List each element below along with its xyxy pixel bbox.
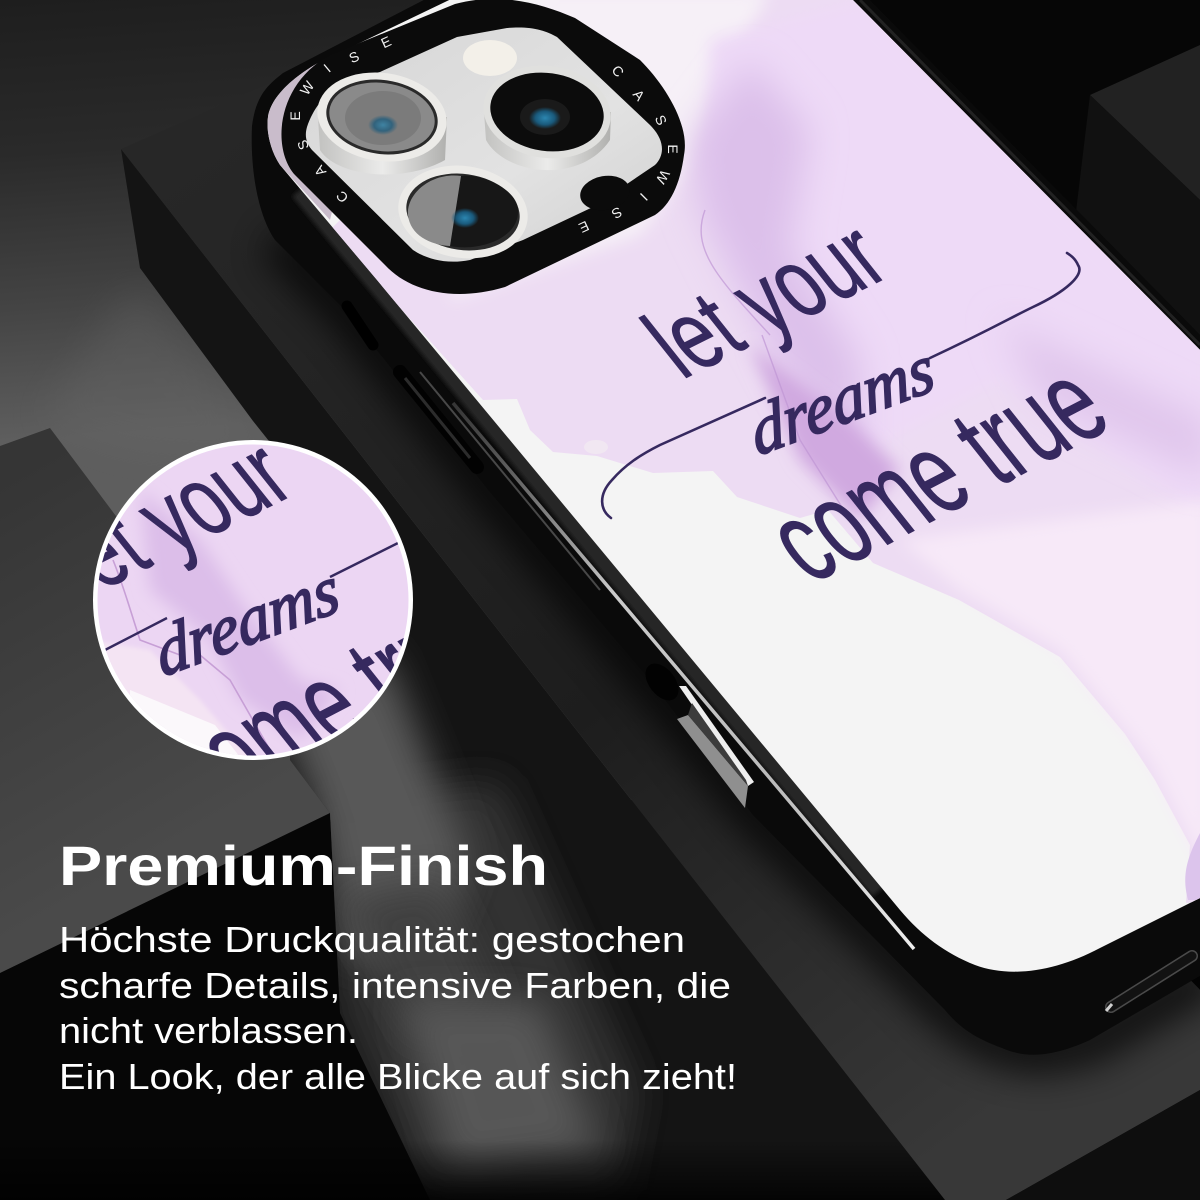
white top area bbox=[450, 0, 770, 300]
CASEWISE ring lettering: E bbox=[287, 111, 303, 121]
CASEWISE ring lettering: S bbox=[346, 48, 362, 66]
lens top-right bbox=[477, 58, 617, 170]
dark step front bbox=[0, 813, 430, 1200]
bottom port bbox=[1106, 956, 1192, 1011]
CASEWISE ring lettering: I bbox=[320, 61, 334, 75]
wide soft sheen bbox=[330, 780, 640, 1190]
secondary rim stripe bbox=[420, 372, 600, 590]
circle: let your: let your bbox=[28, 418, 313, 616]
lens bottom bbox=[392, 157, 534, 267]
circle: flourish bbox=[105, 543, 398, 650]
right patch bbox=[1185, 833, 1200, 900]
let your: let your bbox=[623, 200, 908, 398]
wash edge lines bbox=[701, 210, 850, 520]
print lettering bbox=[602, 200, 1132, 606]
CASEWISE ring lettering: C bbox=[333, 188, 351, 206]
block side face with lit band bbox=[100, 140, 960, 1200]
CASEWISE ring lettering: E bbox=[576, 218, 592, 236]
CASEWISE ring lettering: E bbox=[665, 144, 681, 154]
camera glass bbox=[306, 27, 662, 262]
side button silver bbox=[639, 657, 754, 808]
LiDAR bbox=[577, 172, 633, 214]
lower step surface bbox=[0, 428, 340, 975]
shiny rim stripe bbox=[453, 403, 914, 949]
top-right block bbox=[1090, 45, 1200, 200]
come true: come true bbox=[740, 337, 1132, 606]
circle watercolor bbox=[140, 490, 340, 740]
CASEWISE ring lettering: A bbox=[630, 86, 649, 104]
flourish right bbox=[930, 253, 1079, 358]
CASEWISE ring lettering: S bbox=[609, 204, 625, 222]
body text bbox=[59, 919, 737, 1097]
case outer body bbox=[252, 0, 1200, 1055]
lens top-left bbox=[312, 64, 452, 174]
camera bezel bbox=[268, 0, 685, 294]
lit glow left of the block bbox=[40, 290, 270, 460]
button slot volume bbox=[400, 372, 477, 467]
CASEWISE ring lettering: A bbox=[310, 162, 329, 179]
flash bbox=[463, 40, 517, 76]
pale lilac wash bbox=[330, 0, 1200, 903]
CASEWISE ring lettering: S bbox=[652, 112, 670, 128]
CASEWISE ring lettering: C bbox=[609, 62, 627, 80]
upper lit band bbox=[280, 650, 470, 960]
middle lit band bbox=[354, 878, 479, 1000]
detail zoom circle bbox=[93, 440, 413, 760]
line 3: nicht verblassen. bbox=[59, 1010, 358, 1051]
circle: dreams: dreams bbox=[149, 549, 345, 692]
flourish left bbox=[602, 398, 765, 518]
CASEWISE ring lettering: W bbox=[652, 167, 673, 187]
purple mid bbox=[706, 0, 1200, 350]
bottom-right dark corner bbox=[1006, 1090, 1200, 1200]
phone contact shadow bbox=[275, 240, 1200, 1055]
pale pink lower right bbox=[916, 504, 1200, 842]
line 4: Ein Look, der alle Blicke auf sich zieht! bbox=[59, 1056, 737, 1097]
CASEWISE ring lettering bbox=[287, 33, 681, 236]
lilac inner rim bbox=[268, 50, 370, 220]
black ring bbox=[281, 0, 685, 294]
edge sheen right bbox=[860, 0, 1200, 345]
heading: Premium-Finish bbox=[59, 834, 548, 897]
button slot upper bbox=[347, 306, 373, 345]
case back print: watercolor bbox=[268, 0, 1200, 972]
line 1: Höchste Druckqualität: gestochen bbox=[59, 919, 685, 960]
droplet bbox=[584, 440, 608, 454]
circle: come true: come true bbox=[135, 567, 527, 836]
phone case bbox=[252, 0, 1200, 1055]
dreams: dreams bbox=[744, 328, 940, 471]
CASEWISE ring lettering: I bbox=[637, 190, 651, 204]
CASEWISE ring lettering: W bbox=[297, 77, 318, 98]
lower glow bbox=[400, 1000, 600, 1170]
side wall sheen bbox=[300, 190, 880, 890]
CASEWISE ring lettering: E bbox=[378, 33, 394, 51]
line 2: scharfe Details, intensive Farben, die bbox=[59, 965, 731, 1006]
CASEWISE ring lettering: S bbox=[294, 138, 312, 152]
